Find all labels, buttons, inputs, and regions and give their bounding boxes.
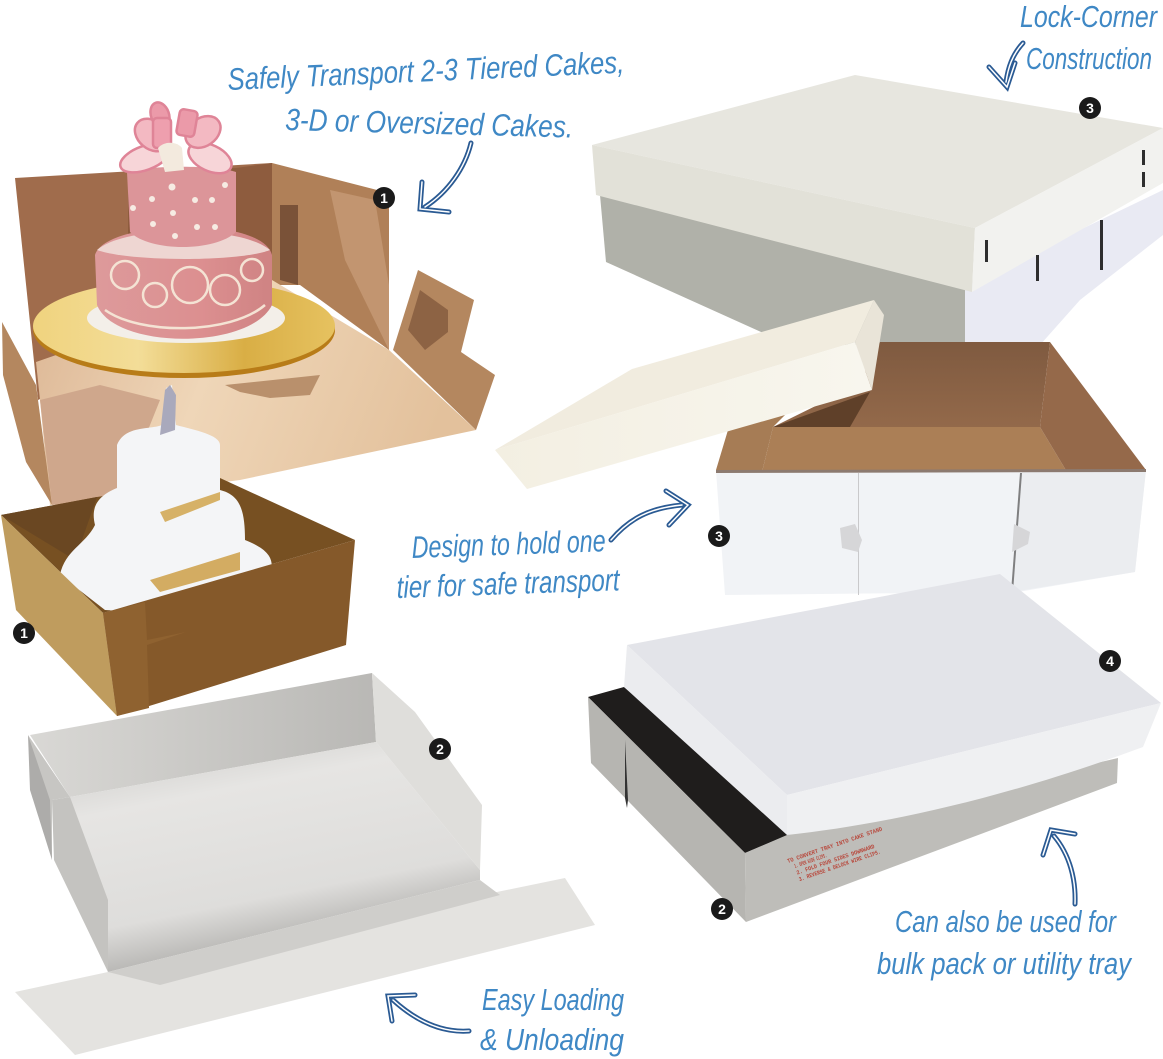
badge 3 open box	[708, 525, 730, 547]
printed instructions on tray edge: 1. OPEN WIDE CLIPS.	[793, 852, 828, 870]
caption: easy loading: & Unloading	[480, 1022, 624, 1057]
product photo: open white box with tilted lid	[495, 300, 1146, 595]
badge 4: 4	[1106, 653, 1114, 669]
badge 1 top	[373, 187, 395, 209]
caption: design to hold: Design to hold one	[411, 523, 606, 565]
arrow: easy loading	[388, 995, 469, 1031]
silver topper	[160, 385, 176, 435]
product photo: kraft box with white wedding cake	[1, 385, 355, 716]
fold-down flap	[15, 878, 595, 1055]
lid top	[627, 574, 1161, 795]
badge 2 lower right	[711, 898, 733, 920]
printed instructions on tray edge	[786, 826, 890, 885]
left inner	[716, 410, 790, 472]
badge 2 tray	[429, 738, 451, 760]
caption: lock-corner	[1020, 0, 1158, 76]
pink cake bottom tier	[95, 227, 272, 339]
bow	[116, 100, 236, 180]
caption: easy loading	[480, 982, 624, 1057]
badge 1 top: 1	[380, 190, 388, 206]
gold bands	[160, 492, 220, 522]
badge 2 lower right: 2	[718, 901, 726, 917]
back wall	[773, 342, 1050, 427]
badge 1 lower: 1	[20, 625, 28, 641]
dark interior	[588, 687, 800, 853]
front panels	[716, 470, 1146, 595]
caption: safely transport: Safely Transport 2-3 Tiered Cakes,	[227, 45, 625, 97]
arrow: design to hold	[611, 491, 688, 540]
white cake	[60, 385, 272, 612]
badge 3 open box: 3	[715, 528, 723, 544]
printed instructions on tray edge: TO CONVERT TRAY INTO CAKE STAND	[786, 826, 884, 865]
caption: design to hold: tier for safe transport	[396, 562, 621, 605]
tray right face	[745, 758, 1118, 922]
right wall	[1040, 342, 1146, 472]
gold cake board	[33, 282, 335, 378]
product photo: closed white lock-corner box	[592, 75, 1163, 345]
bow knot	[158, 143, 184, 172]
arrow: bulk pack	[1043, 830, 1075, 904]
caption: design to hold	[396, 523, 621, 605]
arrow: lock-corner	[989, 43, 1023, 87]
kraft box right side	[103, 540, 355, 716]
doily	[87, 293, 285, 343]
caption: safely transport: 3-D or Oversized Cakes.	[285, 102, 574, 145]
badge 4	[1099, 650, 1121, 672]
caption: bulk pack	[877, 904, 1133, 981]
tray left face	[588, 697, 746, 922]
kraft box left side	[1, 515, 117, 716]
badge 3 top: 3	[1086, 100, 1094, 116]
arrow: to cake box	[420, 143, 471, 212]
printed instructions on tray edge: 3. REVERSE & DELOCK WIRE CLIPS.	[798, 849, 882, 883]
badge 2 tray: 2	[436, 741, 444, 757]
product photo: open kraft box with two-tier pink cake	[2, 100, 495, 505]
caption: safely transport	[227, 45, 625, 145]
printed instructions on tray edge: 2. FOLD FOUR SIDES DOWNWARD	[796, 843, 876, 877]
product photo: white lid on grey tray	[588, 574, 1161, 922]
caption: easy loading: Easy Loading	[482, 982, 624, 1017]
lid	[495, 300, 874, 450]
product photo: grey tray with fold-down side	[15, 673, 595, 1055]
lid sides	[624, 645, 787, 835]
badge 1 lower	[13, 622, 35, 644]
tabs	[840, 524, 862, 552]
badge 3 top	[1079, 97, 1101, 119]
pink cake top tier	[127, 167, 236, 247]
interior floor	[762, 427, 1067, 472]
